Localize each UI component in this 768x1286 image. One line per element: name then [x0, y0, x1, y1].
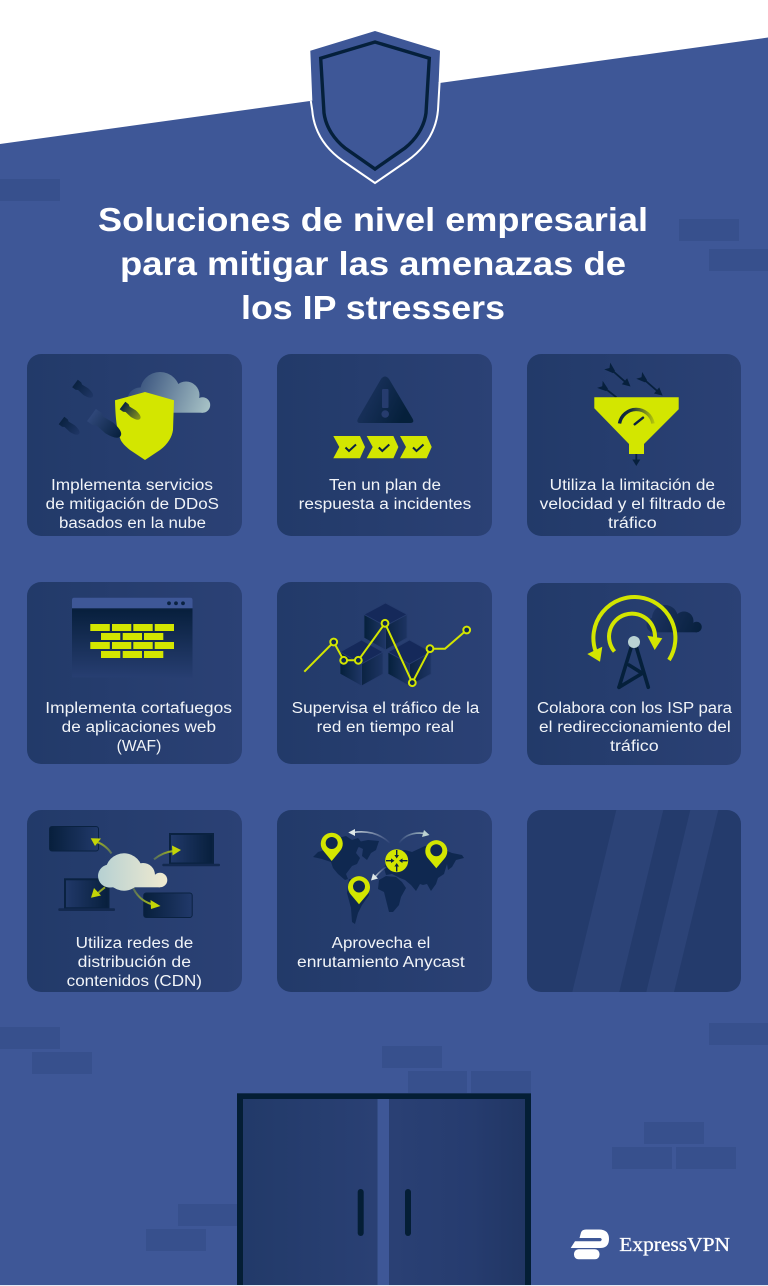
label: de mitigación de DDoS — [46, 496, 219, 513]
door handle left — [358, 1189, 364, 1236]
title: los IP stressers — [241, 289, 505, 326]
label — [297, 935, 465, 971]
label: red en tiempo real — [317, 719, 454, 736]
icon: cubes with line chart — [304, 603, 470, 686]
label: Colabora con los ISP para — [537, 700, 732, 717]
door handle right — [405, 1189, 411, 1236]
panel: web application firewall — [27, 582, 242, 764]
logo wordmark: ExpressVPN — [619, 1235, 730, 1256]
label: respuesta a incidentes — [299, 496, 472, 513]
title: Soluciones de nivel empresarial — [98, 201, 648, 238]
label: Implementa servicios — [51, 477, 213, 494]
panel: empty window card — [527, 810, 741, 992]
label: el redireccionamiento del — [539, 719, 731, 736]
label — [292, 700, 480, 736]
label: Utiliza la limitación de — [550, 477, 715, 494]
label — [45, 700, 232, 755]
panel: content delivery networks — [27, 810, 242, 992]
panel: incident response plan — [277, 354, 492, 536]
label: (WAF) — [117, 738, 161, 755]
label — [46, 477, 219, 532]
icon: ExpressVPN mark — [571, 1230, 609, 1259]
icon: shield, cloud and bombs — [59, 372, 210, 460]
label: contenidos (CDN) — [67, 973, 202, 990]
label: enrutamiento Anycast — [297, 954, 465, 971]
label — [299, 477, 472, 513]
label — [540, 477, 726, 532]
icon: warning triangle with checks — [333, 376, 432, 458]
door — [237, 1093, 531, 1285]
panel: Anycast routing — [277, 810, 492, 992]
label: de aplicaciones web — [62, 719, 216, 736]
label: Implementa cortafuegos — [45, 700, 232, 717]
label: tráfico — [610, 738, 659, 755]
label: Aprovecha el — [332, 935, 430, 952]
panel: real-time traffic monitoring — [277, 582, 492, 764]
icon: cloud distributing to devices — [50, 826, 220, 918]
icon: header shield — [310, 31, 440, 184]
label: tráfico — [608, 515, 657, 532]
panel: ISP collaboration — [527, 583, 741, 765]
label: basados en la nube — [59, 515, 206, 532]
label — [537, 700, 732, 755]
panel: rate limiting and filtering — [527, 354, 741, 536]
logo: ExpressVPN — [571, 1230, 730, 1259]
panel: cloud DDoS mitigation — [27, 354, 242, 536]
icon: world map with pins — [313, 829, 464, 924]
icon: funnel with gauge — [594, 363, 679, 466]
label: Utiliza redes de — [76, 935, 193, 952]
label: velocidad y el filtrado de — [540, 496, 726, 513]
title: para mitigar las amenazas de — [120, 245, 626, 282]
label: Ten un plan de — [329, 477, 441, 494]
label: Supervisa el tráfico de la — [292, 700, 480, 717]
icon: antenna tower with rotating arrows — [587, 597, 702, 687]
label — [67, 935, 202, 990]
white top wedge — [0, 0, 768, 144]
title — [98, 201, 648, 326]
icon: browser window with brick wall — [72, 598, 192, 678]
label: distribución de — [78, 954, 191, 971]
